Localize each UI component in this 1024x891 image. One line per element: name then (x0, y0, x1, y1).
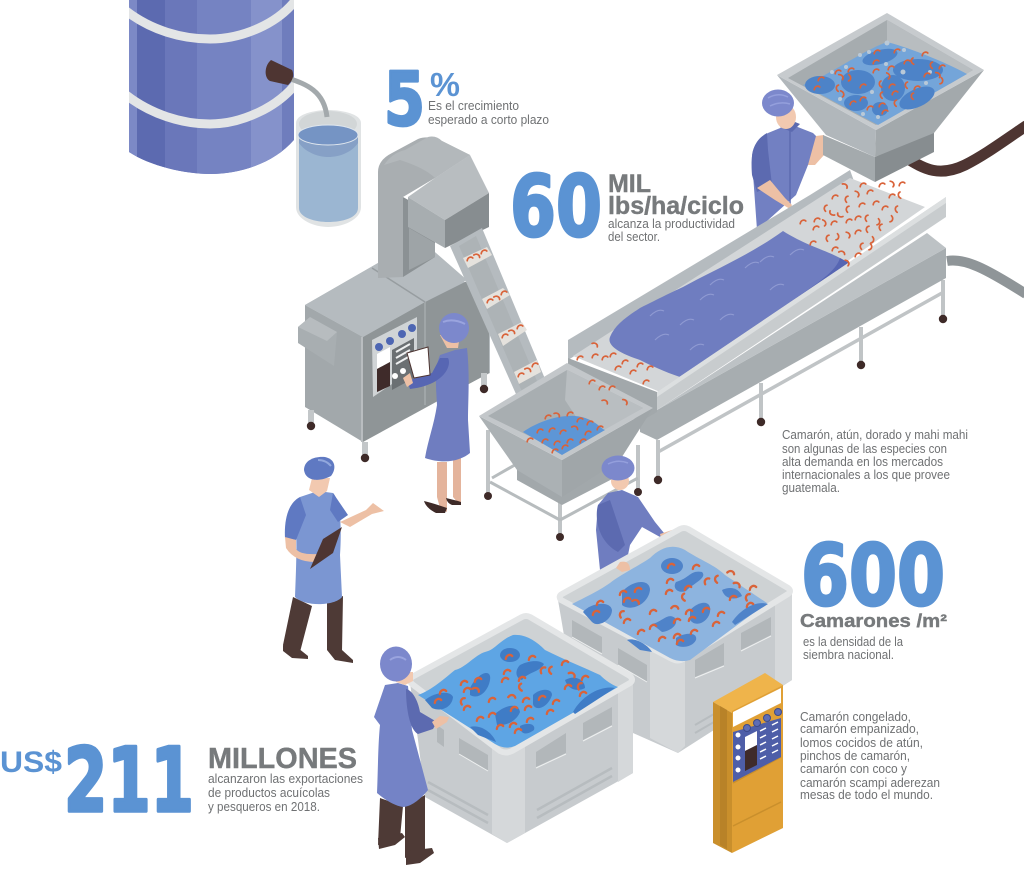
worker at front crate (374, 646, 449, 865)
table body (640, 248, 946, 440)
text: species: son algunas de las especies con (782, 442, 947, 456)
text: products (800, 710, 940, 802)
text: species: alta demanda en los mercados (782, 455, 943, 469)
glass of water (296, 110, 361, 227)
machine body (305, 239, 490, 462)
grey hose (947, 260, 1024, 294)
control panel (372, 317, 417, 397)
stat: 600 camarones: 600 (801, 527, 945, 626)
trough back wall (568, 170, 855, 360)
inclined conveyor with shrimp trays (450, 228, 558, 430)
side box (298, 317, 337, 366)
stat: 5%: esperado a corto plazo (428, 113, 549, 127)
worker behind rear crate (596, 456, 672, 570)
hopper shrimp (814, 49, 945, 114)
stat: US$211 millones: y pesqueros en 2018. (208, 800, 320, 814)
worker with clipboard (283, 457, 384, 663)
stat: 5%: 5 (384, 57, 425, 143)
stat: 600 camarones: Camarones /m² (800, 611, 947, 631)
text: species: internacionales a los que provee (782, 468, 950, 482)
trough bed (573, 178, 925, 392)
stat: US$211 millones: US$ (0, 746, 62, 779)
worker with tablet at machine (403, 313, 470, 513)
trough front end (568, 358, 657, 422)
stat: 600 camarones (800, 527, 947, 662)
text: species (782, 428, 968, 495)
top hopper (777, 13, 1024, 294)
rear crate water (572, 547, 767, 661)
spigot (266, 60, 327, 117)
front crate windows (437, 707, 612, 771)
trays (463, 247, 558, 422)
rear crate windows (572, 617, 771, 682)
hopper legs (484, 430, 642, 541)
text: products: pinchos de camarón, (800, 749, 910, 763)
barrel (129, 0, 294, 174)
stat: 600 camarones: es la densidad de la (803, 635, 903, 649)
stat: US$211 millones: 211 (64, 729, 194, 832)
stat: 60 mil lbs/ha/ciclo: del sector. (608, 230, 660, 244)
stat: 5%: Es el crecimiento (428, 99, 519, 113)
stat: 5% (384, 57, 549, 143)
worker at top hopper (752, 90, 825, 230)
hopper water (803, 42, 967, 125)
text: products: lomos cocidos de atún, (800, 736, 923, 750)
stat: 60 mil lbs/ha/ciclo: 60 (510, 158, 602, 257)
stat: US$211 millones: alcanzaron las exportaciones (208, 772, 363, 786)
long conveyor table (568, 170, 947, 484)
text: products: camarón scampi aderezan (800, 776, 940, 790)
stat: 60 mil lbs/ha/ciclo: lbs/ha/ciclo (608, 192, 744, 220)
stat: 60 mil lbs/ha/ciclo (510, 158, 744, 257)
rear crate shrimp (593, 564, 756, 644)
machine with control panel and duct (298, 136, 490, 462)
lower hopper (479, 363, 653, 541)
text: species: Camarón, atún, dorado y mahi mahi (782, 428, 968, 442)
text: products: camarón con coco y (800, 762, 908, 776)
stat: US$211 millones: de productos acuícolas (208, 786, 330, 800)
table legs (654, 280, 947, 484)
brown pipe (905, 126, 1024, 171)
front crate water (418, 635, 618, 748)
stat: 60 mil lbs/ha/ciclo: alcanza la productividad (608, 217, 735, 231)
shrimp in hopper (527, 380, 627, 453)
duct (378, 136, 489, 278)
stat: 600 camarones: siembra nacional. (803, 648, 894, 662)
stat: US$211 millones (0, 729, 363, 832)
blue mat (609, 231, 862, 377)
front crate shrimp (435, 655, 588, 733)
yellow control cabinet (713, 673, 783, 853)
front crate (410, 615, 633, 843)
stat: 60 mil lbs/ha/ciclo: MIL (608, 170, 651, 198)
text: products: Camarón congelado, (800, 710, 911, 724)
right rail (657, 197, 946, 410)
shrimp on bed (577, 181, 905, 384)
text: species: guatemala. (782, 481, 840, 495)
stat: 5%: % (430, 66, 460, 103)
text: products: mesas de todo el mundo. (800, 788, 933, 802)
text: products: camarón empanizado, (800, 722, 919, 736)
rear crate (558, 527, 792, 753)
cabinet panel (733, 708, 782, 782)
stat: US$211 millones: MILLONES (208, 743, 357, 775)
